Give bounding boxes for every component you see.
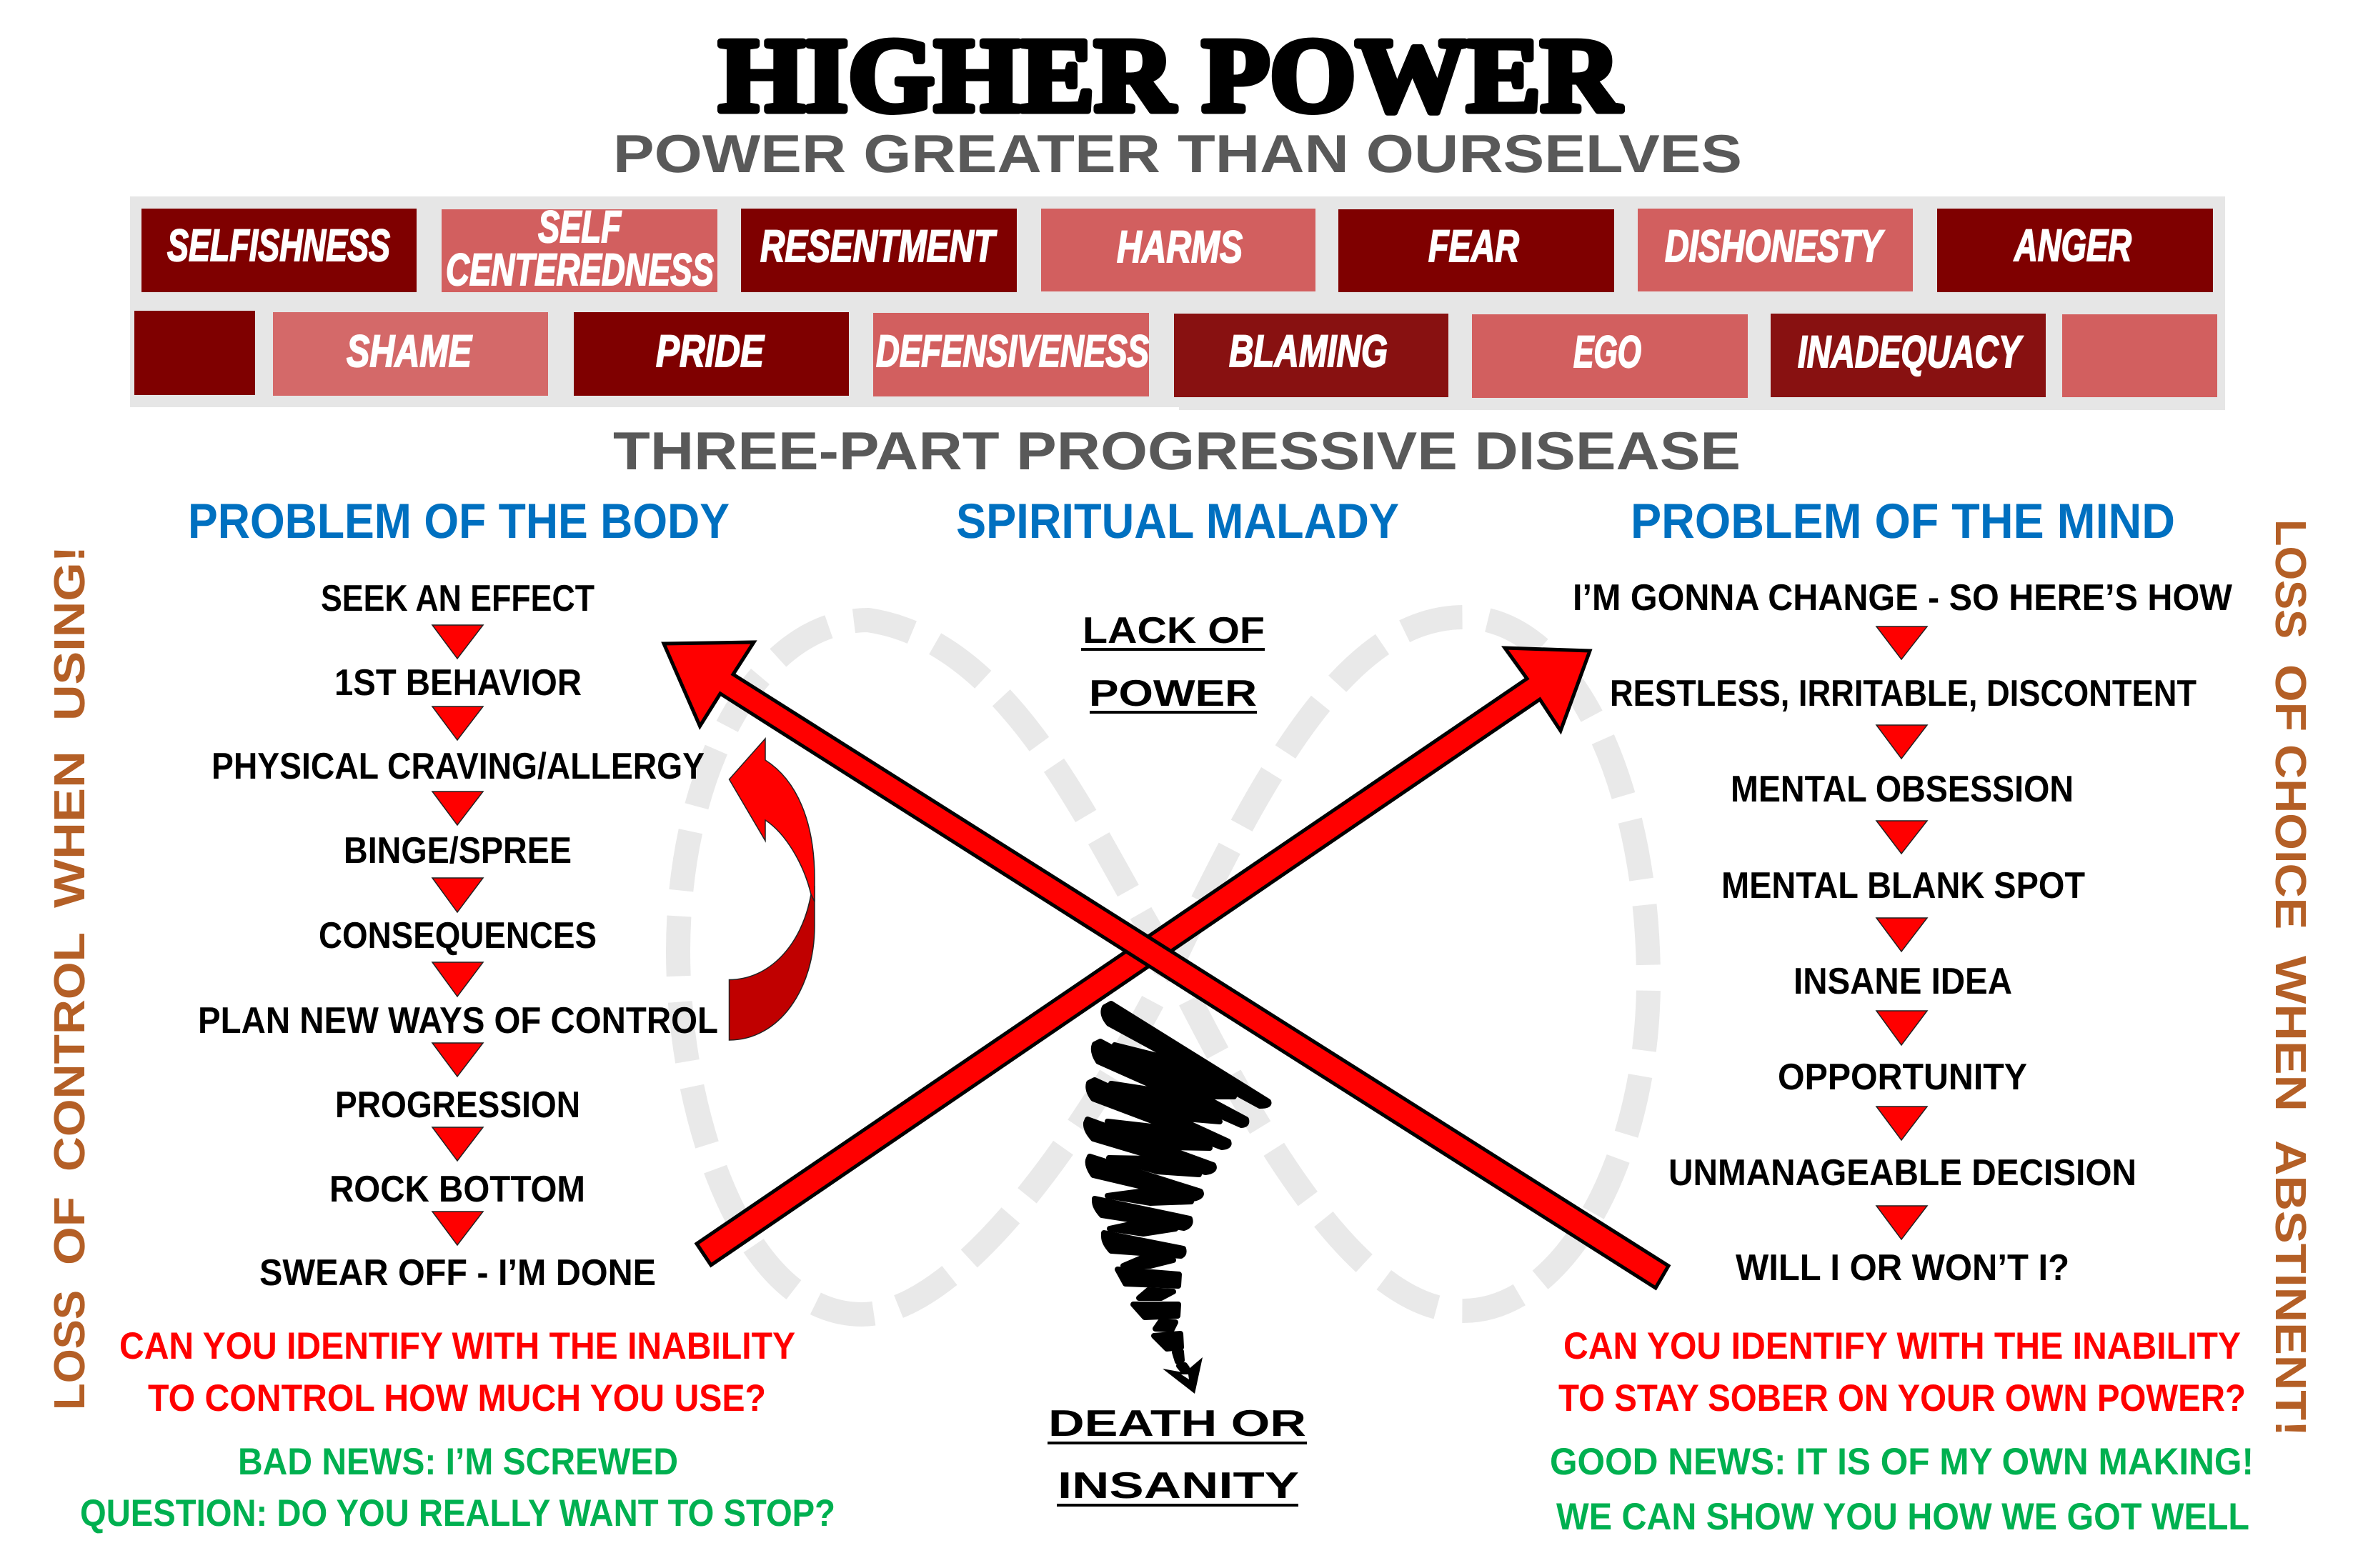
brick: blank light (2062, 314, 2217, 397)
panel: character defects brick wall (130, 196, 2225, 410)
heading: spiritual malady: SPIRITUAL MALADY (956, 494, 1399, 549)
brick: fear: FEAR (1428, 221, 1519, 271)
text block: mind question (1558, 1325, 2246, 1419)
label: death or insanity: INSANITY (1058, 1465, 1299, 1507)
text block: body question (119, 1325, 795, 1419)
list: problem of the mind steps: MENTAL BLANK SPOT (1721, 865, 2085, 907)
list: problem of the body steps: ROCK BOTTOM (329, 1169, 585, 1210)
vertical label: loss of control (45, 546, 94, 1410)
list: problem of the body steps: 1ST BEHAVIOR (334, 662, 582, 704)
list: problem of the body steps: PHYSICAL CRAVING/ALLERGY (212, 746, 705, 787)
list: problem of the mind steps: WILL I OR WON’T I? (1736, 1247, 2069, 1289)
brick: self centeredness (442, 202, 717, 295)
vertical label: loss of choice: LOSS (2267, 519, 2315, 639)
label: lack of power: POWER (1089, 673, 1257, 714)
brick: shame (273, 312, 548, 396)
brick: shame: SHAME (347, 326, 473, 376)
dashed infinity loop (678, 617, 1648, 1314)
brick: harms: HARMS (1117, 222, 1243, 272)
text block: mind question: CAN YOU IDENTIFY WITH THE INABILITY (1563, 1325, 2241, 1367)
list: problem of the mind steps: RESTLESS, IRRITABLE, DISCONTENT (1610, 673, 2197, 714)
brick: anger (1937, 209, 2213, 292)
list: problem of the body steps: PROGRESSION (335, 1084, 580, 1126)
list: problem of the body steps: PLAN NEW WAYS OF CONTROL (198, 1000, 718, 1042)
list: problem of the body steps: BINGE/SPREE (344, 830, 572, 872)
brick: defensiveness: DEFENSIVENESS (876, 326, 1149, 376)
brick: harms (1041, 209, 1315, 291)
text block: mind news: GOOD NEWS: IT IS OF MY OWN MAKING! (1550, 1441, 2254, 1483)
list: problem of the body steps: SWEAR OFF - I’M DONE (259, 1252, 656, 1294)
brick: pride (574, 312, 849, 396)
text block: body news (80, 1441, 835, 1534)
title: HIGHER POWER (719, 17, 1622, 134)
list: problem of the body steps (198, 578, 718, 1294)
vertical label: loss of choice: WHEN (2267, 956, 2315, 1112)
list: problem of the mind steps: UNMANAGEABLE DECISION (1668, 1152, 2136, 1194)
vertical label: loss of choice: OF (2267, 664, 2315, 731)
brick: resentment: RESENTMENT (760, 221, 997, 271)
brick: fear (1338, 209, 1614, 292)
list: problem of the mind steps: OPPORTUNITY (1778, 1057, 2027, 1098)
list: problem of the body steps: CONSEQUENCES (319, 915, 597, 957)
label: lack of power (1081, 610, 1265, 714)
brick: dishonesty: DISHONESTY (1665, 221, 1885, 271)
brick: dishonesty (1638, 209, 1913, 291)
icon: tornado (1086, 1004, 1269, 1394)
icon: curved return arrow (729, 739, 815, 1040)
section heading: THREE-PART PROGRESSIVE DISEASE (613, 421, 1741, 481)
brick: resentment (741, 209, 1017, 292)
brick: inadequacy (1771, 314, 2046, 397)
label: death or insanity: DEATH OR (1048, 1403, 1306, 1444)
brick: blank dark (134, 311, 255, 395)
vertical label: loss of choice (2267, 519, 2315, 1437)
vertical label: loss of control: USING! (45, 546, 94, 721)
vertical label: loss of choice: ABSTINENT! (2267, 1140, 2315, 1437)
brick: blaming (1174, 314, 1448, 397)
vertical label: loss of control: LOSS (45, 1290, 94, 1410)
arrow: up to the right (697, 648, 1590, 1265)
brick: blaming: BLAMING (1229, 326, 1388, 376)
list: problem of the mind steps: I’M GONNA CHANGE - SO HERE’S HOW (1573, 577, 2233, 619)
brick: selfishness: SELFISHNESS (167, 221, 390, 271)
brick: selfishness (141, 209, 417, 292)
list: problem of the mind steps: INSANE IDEA (1794, 961, 2012, 1002)
arrow: up to the left (664, 642, 1668, 1288)
vertical label: loss of control: OF (45, 1197, 94, 1265)
text block: body question: CAN YOU IDENTIFY WITH THE INABILITY (119, 1325, 795, 1367)
brick: ego: EGO (1573, 327, 1641, 377)
list: problem of the body steps: SEEK AN EFFECT (321, 578, 595, 619)
vertical label: loss of control: WHEN (45, 751, 94, 908)
heading: problem of the mind: PROBLEM OF THE MIND (1631, 494, 2175, 549)
brick: self centeredness: CENTEREDNESS (446, 245, 714, 295)
brick: pride: PRIDE (656, 326, 765, 376)
brick: self centeredness: SELF (538, 202, 622, 252)
label: lack of power: LACK OF (1083, 610, 1265, 651)
vertical label: loss of control: CONTROL (45, 932, 94, 1172)
brick: defensiveness (873, 313, 1149, 396)
list: problem of the mind steps: MENTAL OBSESSION (1731, 769, 2074, 810)
text block: body news: BAD NEWS: I’M SCREWED (238, 1441, 678, 1483)
text block: mind news (1550, 1441, 2254, 1538)
subtitle: POWER GREATER THAN OURSELVES (613, 124, 1742, 184)
text block: mind question: TO STAY SOBER ON YOUR OWN POWER? (1558, 1377, 2246, 1419)
brick: ego (1472, 314, 1748, 398)
label: death or insanity (1048, 1403, 1307, 1507)
text block: body news: QUESTION: DO YOU REALLY WANT TO STOP? (80, 1492, 835, 1534)
vertical label: loss of choice: CHOICE (2267, 744, 2315, 929)
text block: body question: TO CONTROL HOW MUCH YOU USE? (148, 1377, 766, 1419)
text block: mind news: WE CAN SHOW YOU HOW WE GOT WELL (1556, 1496, 2249, 1538)
brick: inadequacy: INADEQUACY (1798, 327, 2024, 377)
heading: problem of the body: PROBLEM OF THE BODY (188, 494, 730, 549)
list: problem of the mind steps (1573, 577, 2233, 1289)
brick: anger: ANGER (2014, 221, 2131, 271)
